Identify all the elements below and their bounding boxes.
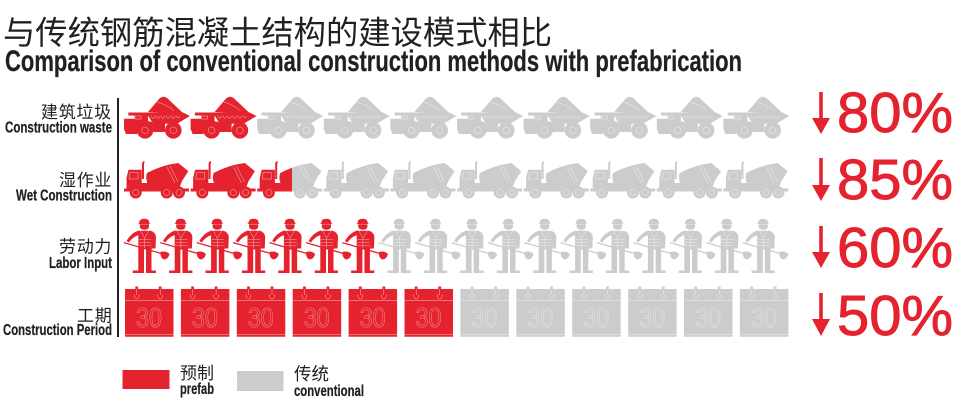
pictogram row: workers, labor input (124, 219, 788, 273)
pictogram row: calendars, construction period (125, 286, 788, 337)
pictogram row: calendars, construction period: 30 (304, 302, 330, 333)
legend text: conventional Chinese: 传统 (294, 364, 329, 384)
label: construction waste Chinese: 建筑垃圾 (41, 103, 112, 122)
legend text: prefab English: prefab (180, 381, 214, 398)
stat: waste down 80%: 80% (837, 81, 953, 145)
pictogram row: calendars, construction period: 30 (527, 302, 553, 333)
pictogram row: calendars, construction period: 30 (471, 302, 497, 333)
legend swatch: conventional (237, 371, 284, 391)
label: construction period English: Construction Period (3, 322, 112, 339)
row axis line (117, 98, 119, 337)
pictogram row: calendars, construction period: 30 (416, 302, 442, 333)
pictogram row: calendars, construction period: 30 (248, 302, 274, 333)
label: labor input English: Labor Input (49, 255, 112, 272)
stat: labor down 60%: 60% (837, 216, 953, 280)
pictogram row: calendars, construction period: 30 (360, 302, 386, 333)
legend text: prefab Chinese: 预制 (180, 364, 214, 383)
pictogram row: mixer trucks, wet construction (124, 161, 788, 198)
pictogram row: calendars, construction period: 30 (192, 302, 218, 333)
legend text: conventional English: conventional (294, 383, 364, 400)
pictogram row: calendars, construction period: 30 (751, 302, 777, 333)
pictogram row: calendars, construction period: 30 (695, 302, 721, 333)
label: wet construction English: Wet Construction (16, 188, 112, 204)
row labels (3, 103, 112, 339)
stat: wet construction down 85%: 85% (837, 148, 953, 212)
legend (122, 364, 364, 400)
pictogram row: calendars, construction period: 30 (136, 302, 162, 333)
pictogram row: calendars, construction period: 30 (583, 302, 609, 333)
label: construction period Chinese: 工期 (77, 306, 112, 326)
label: construction waste English: Construction waste (5, 120, 112, 136)
pictogram row: dump trucks, construction waste (124, 97, 789, 139)
pictogram row: calendars, construction period: 30 (639, 302, 665, 333)
title: Chinese heading: 与传统钢筋混凝土结构的建设模式相比 (3, 15, 552, 51)
legend swatch: prefab (122, 370, 170, 389)
label: wet construction Chinese: 湿作业 (59, 171, 112, 190)
stat: period down 50%: 50% (837, 284, 953, 348)
label: labor input Chinese: 劳动力 (59, 238, 112, 256)
